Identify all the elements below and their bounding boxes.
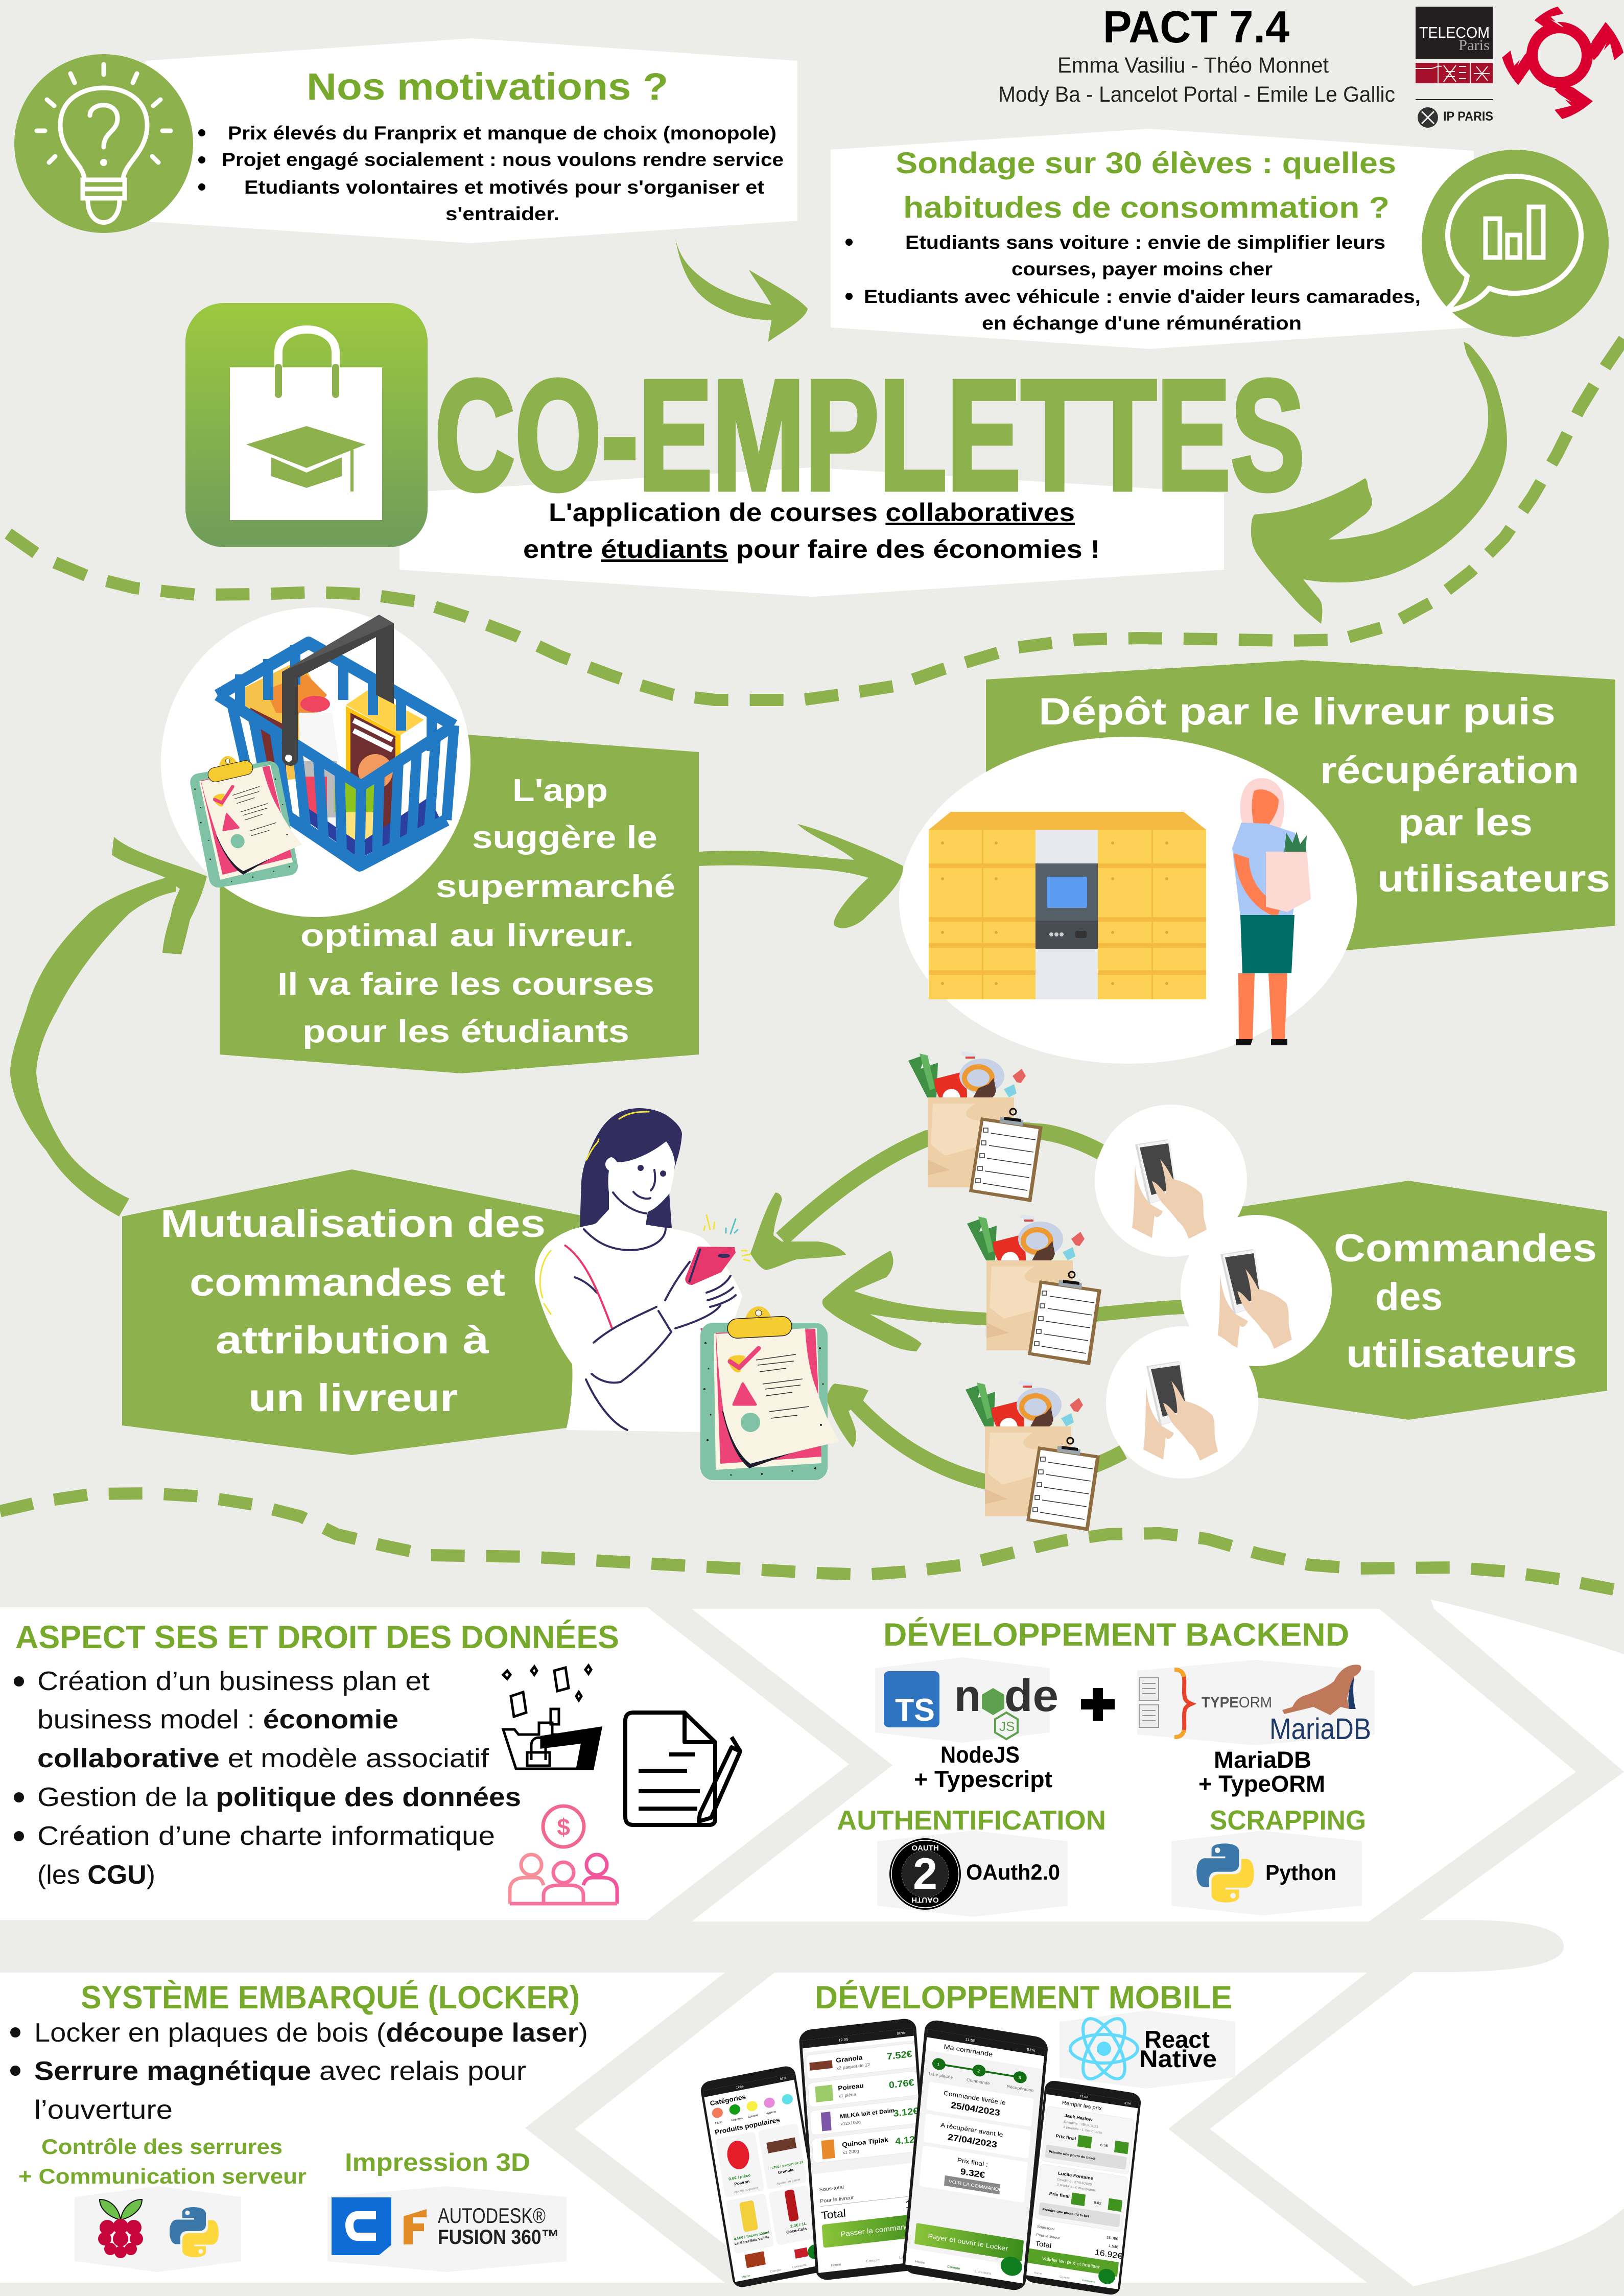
phone: basket screen: x2 paquet de 12	[836, 2062, 870, 2071]
icon: folder with lock	[503, 1666, 601, 1769]
phone: order tracking screen: VOIR LA COMMANDE	[948, 2179, 1003, 2193]
panel: locker ellipse	[899, 737, 1357, 1064]
phone: order tracking screen: Commande livrée le	[944, 2089, 1006, 2106]
phone: price entry screen	[1023, 2079, 1142, 2296]
list: survey: Etudiants sans voiture : envie de simplifier leurs	[905, 232, 1385, 253]
list: embedded system: l’ouverture	[34, 2095, 173, 2125]
subtitle text: entre étudiants pour faire des économies !	[523, 535, 1100, 564]
list: embedded system: Serrure magnétique avec relais pour	[34, 2056, 526, 2086]
text: user orders: utilisateurs	[1346, 1332, 1577, 1376]
phone: basket screen	[799, 2019, 920, 2280]
dashed path: upper separator	[0, 339, 1624, 700]
illustration: shopping basket	[218, 615, 454, 865]
illustration: parcel locker	[929, 812, 1206, 999]
phone: price entry screen: Prix final	[1055, 2134, 1076, 2141]
phone: order tracking screen: 11:58	[965, 2037, 976, 2043]
text: mutualisation: un livreur	[248, 1376, 458, 1420]
phone: basket screen: x1 pièce	[838, 2092, 856, 2099]
panel: backend	[692, 1609, 1576, 1922]
text: locker delivery: Dépôt par le livreur puis	[1039, 690, 1556, 733]
icon: light bulb with question mark	[14, 54, 193, 233]
text: locker delivery: par les	[1398, 801, 1533, 844]
phone: home screen: Ajouter au panier	[734, 2187, 758, 2194]
phone: price entry screen: 3 produits - 1 manquants	[1063, 2125, 1102, 2135]
text: L'app suggestion: optimal au livreur.	[300, 918, 634, 953]
phone: price entry screen: Total	[1035, 2240, 1052, 2250]
icon: hand and phone 2	[1181, 1215, 1332, 1366]
phone: basket screen: Home	[831, 2262, 841, 2267]
phone: price entry screen: Jack Harlow	[1064, 2113, 1093, 2122]
heading: embedded system: SYSTÈME EMBARQUÉ (LOCKER)	[81, 1980, 580, 2016]
phone: basket screen: Quinoa Tipiak	[842, 2136, 889, 2148]
list: aspect SES: Gestion de la politique des données	[37, 1783, 521, 1812]
labels: backend technologies: NodeJS	[940, 1742, 1020, 1768]
subtitle text	[523, 498, 1100, 564]
phone: home screen: 11:58	[736, 2085, 744, 2090]
phone: price entry screen: 81%	[1124, 2102, 1132, 2106]
panel: far right chevron	[1210, 1772, 1624, 2286]
labels: backend technologies	[914, 1742, 1325, 1797]
phone: order tracking screen: Prix final :	[957, 2156, 988, 2168]
phone: order tracking screen: 3	[1018, 2075, 1021, 2080]
logos: Autodesk Fusion 360: AUTODESK®	[438, 2204, 546, 2228]
title block: PACT 7.4	[998, 2, 1395, 107]
text: mutualisation: commandes et	[190, 1261, 505, 1304]
heading: lock control	[18, 2135, 307, 2188]
phone: basket screen: 0.76€	[888, 2078, 915, 2091]
phone: order tracking screen: 1	[937, 2062, 940, 2067]
text: L'app suggestion: suggère le	[472, 820, 657, 855]
list: aspect SES: Création d’une charte informatique	[37, 1821, 495, 1851]
phone: price entry screen: Pour le livreur	[1036, 2232, 1061, 2240]
phone: basket screen: Livraisons	[899, 2254, 917, 2260]
logos: TypeORM and MariaDB	[1137, 1660, 1375, 1746]
phone: basket screen: MILKA lait et Daim	[840, 2107, 895, 2120]
phone: basket screen: 7.52€	[886, 2049, 913, 2062]
text: L'app suggestion	[277, 773, 675, 1049]
phone: home screen: Produits populaires	[714, 2116, 781, 2136]
phone: order tracking screen: Compte	[947, 2265, 960, 2270]
panel: user orders	[1212, 1181, 1607, 1420]
phone: home screen: Fruits	[715, 2121, 723, 2125]
text: L'app suggestion: L'app	[512, 773, 608, 808]
phone: order tracking screen	[902, 2019, 1049, 2292]
list: aspect SES	[14, 1667, 521, 1890]
text: user orders	[1334, 1227, 1597, 1376]
phone: order tracking screen: Récupération	[1006, 2084, 1034, 2093]
phone: home screen: Le Marseillais Vanille	[735, 2236, 770, 2246]
list: motivations: Projet engagé socialement : nous voulons rendre service	[222, 149, 784, 170]
icon: clipboard with woman	[700, 1306, 839, 1480]
panel: aspect SES	[0, 1607, 849, 1920]
icon: grocery bag with list 3	[966, 1380, 1100, 1531]
heading: aspect SES: ASPECT SES ET DROIT DES DONNÉES	[15, 1620, 619, 1655]
text: locker delivery: utilisateurs	[1377, 857, 1610, 900]
heading: backend: DÉVELOPPEMENT BACKEND	[883, 1617, 1349, 1653]
text: L'app suggestion: Il va faire les courses	[277, 967, 654, 1002]
list: aspect SES: (les CGU)	[37, 1860, 155, 1890]
phone: basket screen: x1 200g	[842, 2148, 859, 2155]
text: mutualisation: Mutualisation des	[160, 1202, 546, 1246]
logo: OAuth2: 2	[913, 1849, 937, 1899]
phone: price entry screen: Deadline : 28/04/2023	[1064, 2120, 1098, 2129]
phone: price entry screen: Deadline : 27/04/2023	[1057, 2178, 1092, 2187]
icon: speech bubble chart	[1422, 150, 1609, 337]
logo: OAuth2: OAUTH	[911, 1895, 939, 1904]
panel: L'app suggestion	[220, 734, 699, 1073]
heading: mobile development: DÉVELOPPEMENT MOBILE	[815, 1980, 1232, 2016]
panel: embedded system	[0, 1973, 725, 2283]
phone: home screen: Hygiène	[765, 2111, 776, 2115]
phone: price entry screen: Sous-total	[1037, 2224, 1055, 2231]
phone: home screen: Poivron	[734, 2179, 750, 2187]
phone: home screen: Home	[742, 2275, 751, 2279]
illustration: clipboard at basket	[186, 746, 308, 889]
dashed path: lower separator	[0, 1493, 1624, 1591]
phone: price entry screen: Livraisons	[1082, 2279, 1095, 2284]
text: mutualisation	[160, 1202, 546, 1420]
phone: home screen: 3.76€ / paquet de 12	[770, 2161, 804, 2170]
logo: red ring	[1502, 7, 1623, 119]
icon: hand and phone 1	[1095, 1105, 1247, 1257]
phone: order tracking screen: A récupérer avant le	[940, 2121, 1003, 2138]
logo: OAuth2: OAuth2.0	[966, 1860, 1060, 1885]
title block: PACT 7.4: PACT 7.4	[1103, 2, 1289, 52]
list: motivations: s'entraider.	[445, 203, 559, 224]
heading: motivations: Nos motivations ?	[307, 65, 668, 108]
phone: home screen: Granola	[778, 2167, 794, 2175]
subtitle text: L'application de courses collaboratives	[549, 498, 1075, 527]
phone: basket screen: 17	[905, 2197, 919, 2211]
phone: home screen: Ajouter au panier	[776, 2178, 801, 2186]
logo: Python	[1171, 1831, 1362, 1915]
heading: scrapping: SCRAPPING	[1210, 1805, 1366, 1836]
labels: backend technologies: + Typescript	[914, 1766, 1052, 1792]
phone: order tracking screen: Livraisons	[975, 2269, 992, 2276]
phone: home screen: 81%	[780, 2077, 787, 2081]
panel: right chevron	[1431, 1600, 1624, 1772]
heading: lock control: Contrôle des serrures	[41, 2135, 283, 2159]
phone: price entry screen: 3 produits - 0 manquants	[1056, 2183, 1096, 2192]
logos: TypeScript and NodeJS: TS	[895, 1693, 935, 1728]
arrow: loop back to basket	[10, 837, 207, 1216]
phone: price entry screen: Compte	[1060, 2276, 1070, 2280]
phone: home screen: Livraisons	[792, 2264, 807, 2269]
text: user orders: Commandes	[1334, 1227, 1597, 1270]
phone: home screen	[701, 2066, 816, 2287]
phone: price entry screen: Home	[1034, 2271, 1042, 2276]
list: survey: en échange d'une rémunération	[982, 313, 1302, 334]
logos: TypeScript and NodeJS	[875, 1657, 1058, 1743]
logos: Raspberry Pi and Python	[75, 2186, 241, 2272]
icon: people with money: $	[557, 1814, 570, 1840]
phone: order tracking screen: 81%	[1027, 2047, 1035, 2053]
phone: price entry screen: 1.54€	[1109, 2243, 1118, 2250]
illustration: woman using phone	[535, 1108, 758, 1432]
heading: survey: Sondage sur 30 élèves : quelles	[896, 147, 1396, 180]
phone: order tracking screen: 27/04/2023	[947, 2131, 998, 2149]
list: motivations	[198, 123, 784, 224]
phone: home screen: Epicerie	[748, 2114, 759, 2119]
logo: Python: Python	[1265, 1861, 1336, 1885]
heading: authentification: AUTHENTIFICATION	[837, 1805, 1106, 1836]
arrow: order 1 to mutualisation	[750, 1130, 1101, 1270]
logos: TypeScript and NodeJS: JS	[999, 1719, 1015, 1734]
logo: Telecom Paris	[1416, 7, 1493, 128]
logo: React Native: React	[1144, 2026, 1210, 2053]
phone: price entry screen: Prendre une photo du ticket	[1042, 2208, 1090, 2218]
phone: home screen: Coca-Cola	[786, 2227, 807, 2235]
arrow: order 3 to mutualisation	[827, 1384, 1123, 1484]
phone: price entry screen: Lucile Fontaine	[1058, 2171, 1094, 2181]
logo: OAuth2	[877, 1831, 1068, 1917]
list: embedded system	[10, 2018, 588, 2125]
phone: home screen: 2.3€ / 1L	[790, 2221, 807, 2229]
icon: application logo	[185, 303, 428, 547]
phone: order tracking screen: Home	[915, 2260, 925, 2265]
phone: basket screen: Sous-total	[819, 2185, 844, 2193]
heading: 3D printing: Impression 3D	[345, 2149, 530, 2176]
logo: Telecom Paris: TELECOM	[1419, 24, 1490, 41]
phone: basket screen: 12:05	[838, 2037, 849, 2043]
text: user orders: des	[1375, 1275, 1443, 1319]
phone: home screen: 4.50€ / flacon 300ml	[734, 2230, 770, 2241]
phone: basket screen: Compte	[866, 2258, 880, 2263]
panel: mobile development	[575, 1973, 1367, 2296]
icon: document with pen	[625, 1713, 740, 1825]
phone: basket screen: Total	[820, 2207, 846, 2222]
labels: backend technologies: + TypeORM	[1198, 1771, 1325, 1797]
phone: price entry screen: Prendre une photo du ticket	[1048, 2150, 1096, 2161]
text: L'app suggestion: pour les étudiants	[302, 1014, 629, 1049]
list: aspect SES: Création d’un business plan et	[37, 1667, 430, 1696]
title block: PACT 7.4: Mody Ba - Lancelot Portal - Emile Le Gallic	[998, 82, 1395, 107]
title block: PACT 7.4: Emma Vasiliu - Théo Monnet	[1057, 53, 1329, 78]
phone: order tracking screen: Liste placée	[929, 2071, 953, 2080]
logos: TypeScript and NodeJS: de	[1004, 1670, 1058, 1721]
panel: basket circle	[161, 607, 470, 917]
icon: grocery bag with list 1	[908, 1051, 1043, 1202]
arrow: survey to application	[1251, 342, 1507, 624]
list: aspect SES: collaborative et modèle associatif	[37, 1744, 489, 1773]
text: L'app suggestion: supermarché	[436, 869, 675, 904]
panel: survey	[831, 129, 1474, 349]
phone: price entry screen: Remplir les prix	[1062, 2100, 1102, 2112]
phone: home screen: Légumes	[731, 2117, 743, 2122]
logos: TypeORM and MariaDB: MariaDB	[1269, 1713, 1371, 1746]
list: survey	[845, 232, 1421, 334]
phone: order tracking screen: 9.32€	[960, 2166, 985, 2180]
phone: basket screen: Granola	[836, 2054, 863, 2064]
phone: home screen: Catégories	[710, 2093, 746, 2107]
list: survey: Etudiants avec véhicule : envie d'aider leurs camarades,	[864, 286, 1421, 307]
text: locker delivery	[1039, 690, 1610, 900]
phone: basket screen: Passer la commande	[840, 2222, 914, 2239]
arrow: order 2 to mutualisation	[822, 1251, 1185, 1351]
arrow: motivations to survey	[675, 239, 808, 342]
heading: lock control: + Communication serveur	[18, 2164, 307, 2188]
phone: order tracking screen: Ma commande	[944, 2043, 993, 2058]
phone: price entry screen: 15.38€	[1106, 2235, 1118, 2241]
icon: plus sign	[1081, 1688, 1115, 1721]
list: embedded system: Locker en plaques de bois ( découpe laser )	[34, 2018, 588, 2048]
phone: price entry screen: 8.82	[1094, 2200, 1101, 2206]
phone: order tracking screen: 25/04/2023	[950, 2100, 1001, 2118]
heading: survey: habitudes de consommation ?	[903, 191, 1390, 224]
panel: subtitle	[399, 467, 1224, 597]
heading: survey	[896, 147, 1396, 224]
list: aspect SES: business model : économie	[37, 1705, 398, 1735]
list: survey: courses, payer moins cher	[1011, 259, 1273, 279]
phone: home screen: Compte	[770, 2268, 782, 2274]
logos: TypeScript and NodeJS: n	[954, 1670, 981, 1721]
illustration: woman with grocery bag	[1232, 778, 1311, 1045]
panel: locker delivery	[986, 660, 1615, 954]
phone: basket screen: x12x100g	[840, 2119, 861, 2126]
logo: Telecom Paris: Paris	[1458, 37, 1490, 54]
panel: mutualisation	[122, 1169, 586, 1455]
icon: people with money	[510, 1806, 617, 1904]
phone: basket screen: Poireau	[838, 2082, 864, 2092]
arrow: basket to locker	[699, 824, 903, 928]
list: motivations: Etudiants volontaires et motivés pour s'organiser et	[244, 177, 764, 198]
phone: basket screen: 80%	[897, 2030, 905, 2036]
phone: basket screen: 3.12€	[893, 2106, 919, 2119]
text: mutualisation: attribution à	[216, 1319, 489, 1362]
logos: Autodesk Fusion 360: FUSION 360™	[438, 2226, 559, 2248]
phone: price entry screen: 6.58	[1100, 2143, 1108, 2148]
panel: motivations	[145, 38, 797, 243]
phone: price entry screen: Prix final	[1049, 2191, 1070, 2199]
phone: order tracking screen: 2	[977, 2068, 980, 2074]
logo: React Native	[1060, 2010, 1235, 2089]
icon: hand and phone 3	[1106, 1326, 1258, 1479]
list: motivations: Prix élevés du Franprix et manque de choix (monopole)	[228, 123, 776, 144]
phone: basket screen: Pour le livreur	[820, 2195, 854, 2205]
phone: order tracking screen: Commande	[967, 2077, 990, 2086]
icon: grocery bag with list 2	[967, 1214, 1101, 1365]
logos: TypeORM and MariaDB: TYPEORM	[1202, 1694, 1272, 1711]
logo: Telecom Paris: IP PARIS	[1443, 109, 1493, 124]
phone: price entry screen: 16.92€	[1094, 2247, 1123, 2261]
labels: backend technologies: MariaDB	[1214, 1747, 1311, 1773]
text: locker delivery: récupération	[1320, 749, 1579, 791]
logos: Autodesk Fusion 360	[327, 2186, 567, 2272]
logo: React Native: Native	[1139, 2045, 1217, 2072]
logo: OAuth2: OAUTH	[911, 1844, 939, 1853]
phone: price entry screen: Valider les prix et finaliser	[1042, 2256, 1100, 2270]
phone: order tracking screen: Payer et ouvrir le Locker	[928, 2232, 1008, 2253]
phone: home screen: 0.6€ / pièce	[728, 2173, 751, 2182]
phone: basket screen: 4.12	[895, 2135, 915, 2147]
phone: price entry screen: 12:04	[1079, 2095, 1088, 2099]
